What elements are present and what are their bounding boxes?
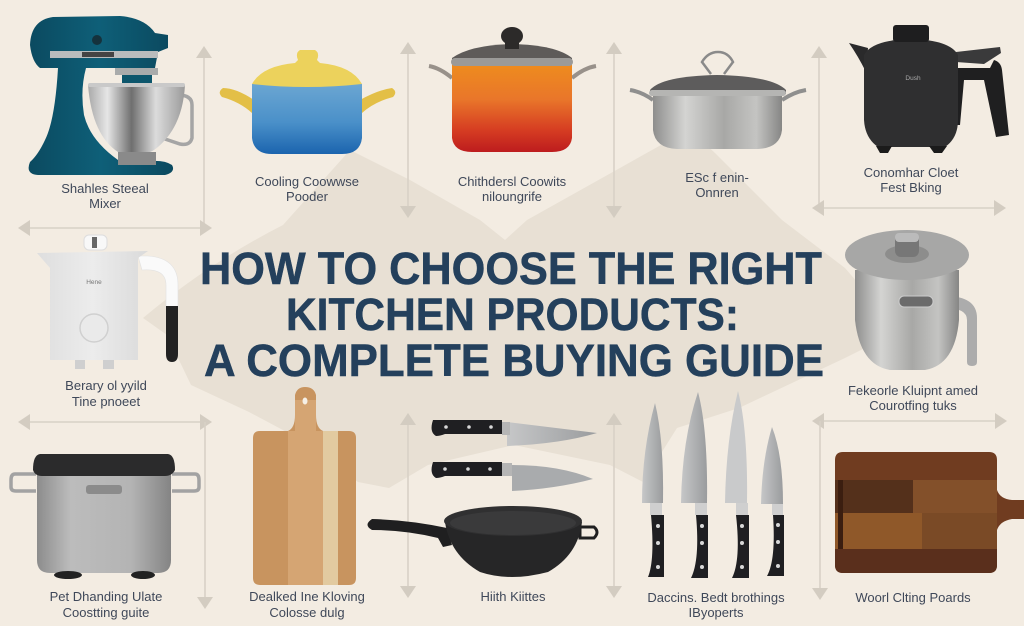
label: Pooder bbox=[286, 189, 329, 204]
panel: steel jug bbox=[845, 230, 978, 413]
panel: knife set bbox=[642, 391, 785, 620]
icon: white appliance: Hene bbox=[86, 279, 102, 286]
panel: steel fryer bbox=[11, 454, 199, 620]
icon: frying pan bbox=[368, 506, 597, 577]
icon: black kettle bbox=[849, 25, 1009, 153]
panel: wooden board bbox=[249, 387, 365, 620]
arrow bbox=[812, 421, 828, 600]
title bbox=[200, 243, 824, 386]
icon: steel fryer bbox=[11, 454, 199, 579]
title: KITCHEN PRODUCTS: bbox=[286, 289, 739, 340]
panel: knives and pan bbox=[368, 420, 597, 604]
icon: black kettle: Dush bbox=[905, 75, 921, 82]
label: Pet Dhanding Ulate bbox=[50, 589, 162, 604]
icon: knife bbox=[725, 391, 749, 578]
label: Hiith Kiittes bbox=[480, 589, 546, 604]
arrow bbox=[606, 413, 622, 598]
panel: orange pot bbox=[429, 27, 596, 204]
label: niloungrife bbox=[482, 189, 542, 204]
label: IByoperts bbox=[689, 605, 744, 620]
icon: knife bbox=[642, 403, 664, 577]
panel: stand mixer bbox=[29, 16, 192, 211]
label: Fest Bking bbox=[880, 180, 942, 195]
icon: steel casserole bbox=[630, 52, 806, 149]
panel: enamel pot bbox=[220, 50, 395, 204]
label: Woorl Clting Poards bbox=[855, 590, 971, 605]
icon: blue and yellow pot bbox=[220, 50, 395, 154]
icon: orange stock pot bbox=[429, 27, 596, 152]
label: Onnren bbox=[695, 185, 739, 200]
arrow bbox=[812, 413, 1007, 429]
icon: kitchen knife bbox=[432, 420, 597, 446]
label: Chithdersl Coowits bbox=[458, 174, 567, 189]
arrow bbox=[18, 414, 212, 430]
panel: walnut board bbox=[835, 452, 1024, 605]
icon: knife bbox=[681, 392, 708, 578]
icon: mixer bbox=[29, 16, 192, 175]
label: Conomhar Cloet bbox=[864, 165, 959, 180]
arrow bbox=[18, 220, 212, 236]
arrow bbox=[812, 200, 1006, 216]
icon: walnut cutting board bbox=[835, 452, 1024, 573]
title: A COMPLETE BUYING GUIDE bbox=[204, 335, 824, 386]
arrow bbox=[197, 422, 213, 609]
icon: knife bbox=[761, 427, 784, 576]
title: HOW TO CHOOSE THE RIGHT bbox=[200, 243, 822, 294]
label: Colosse dulg bbox=[269, 605, 345, 620]
arrow bbox=[196, 46, 212, 228]
panel: steel pan bbox=[630, 52, 806, 200]
label: Shahles Steeal bbox=[61, 181, 149, 196]
icon: white appliance bbox=[37, 235, 178, 369]
label: ESc f enin- bbox=[685, 170, 749, 185]
icon: wooden cutting board bbox=[253, 387, 356, 585]
icon: kitchen knife bbox=[432, 462, 593, 491]
icon: steel jug with lid bbox=[845, 230, 977, 370]
label: Tine pnoeet bbox=[72, 394, 140, 409]
arrow bbox=[400, 42, 416, 218]
label: Berary ol yyild bbox=[65, 378, 147, 393]
label: Courotfing tuks bbox=[869, 398, 957, 413]
label: Fekeorle Kluipnt amed bbox=[848, 383, 978, 398]
panel: black kettle bbox=[849, 25, 1009, 195]
arrow bbox=[400, 413, 416, 598]
label: Dealked Ine Kloving bbox=[249, 589, 365, 604]
label: Daccins. Bedt brothings bbox=[647, 590, 785, 605]
arrow bbox=[811, 46, 827, 208]
label: Coostting guite bbox=[63, 605, 149, 620]
label: Cooling Coowwse bbox=[255, 174, 359, 189]
arrow bbox=[606, 42, 622, 218]
panel: white kettle bbox=[37, 235, 178, 409]
label: Mixer bbox=[89, 196, 122, 211]
